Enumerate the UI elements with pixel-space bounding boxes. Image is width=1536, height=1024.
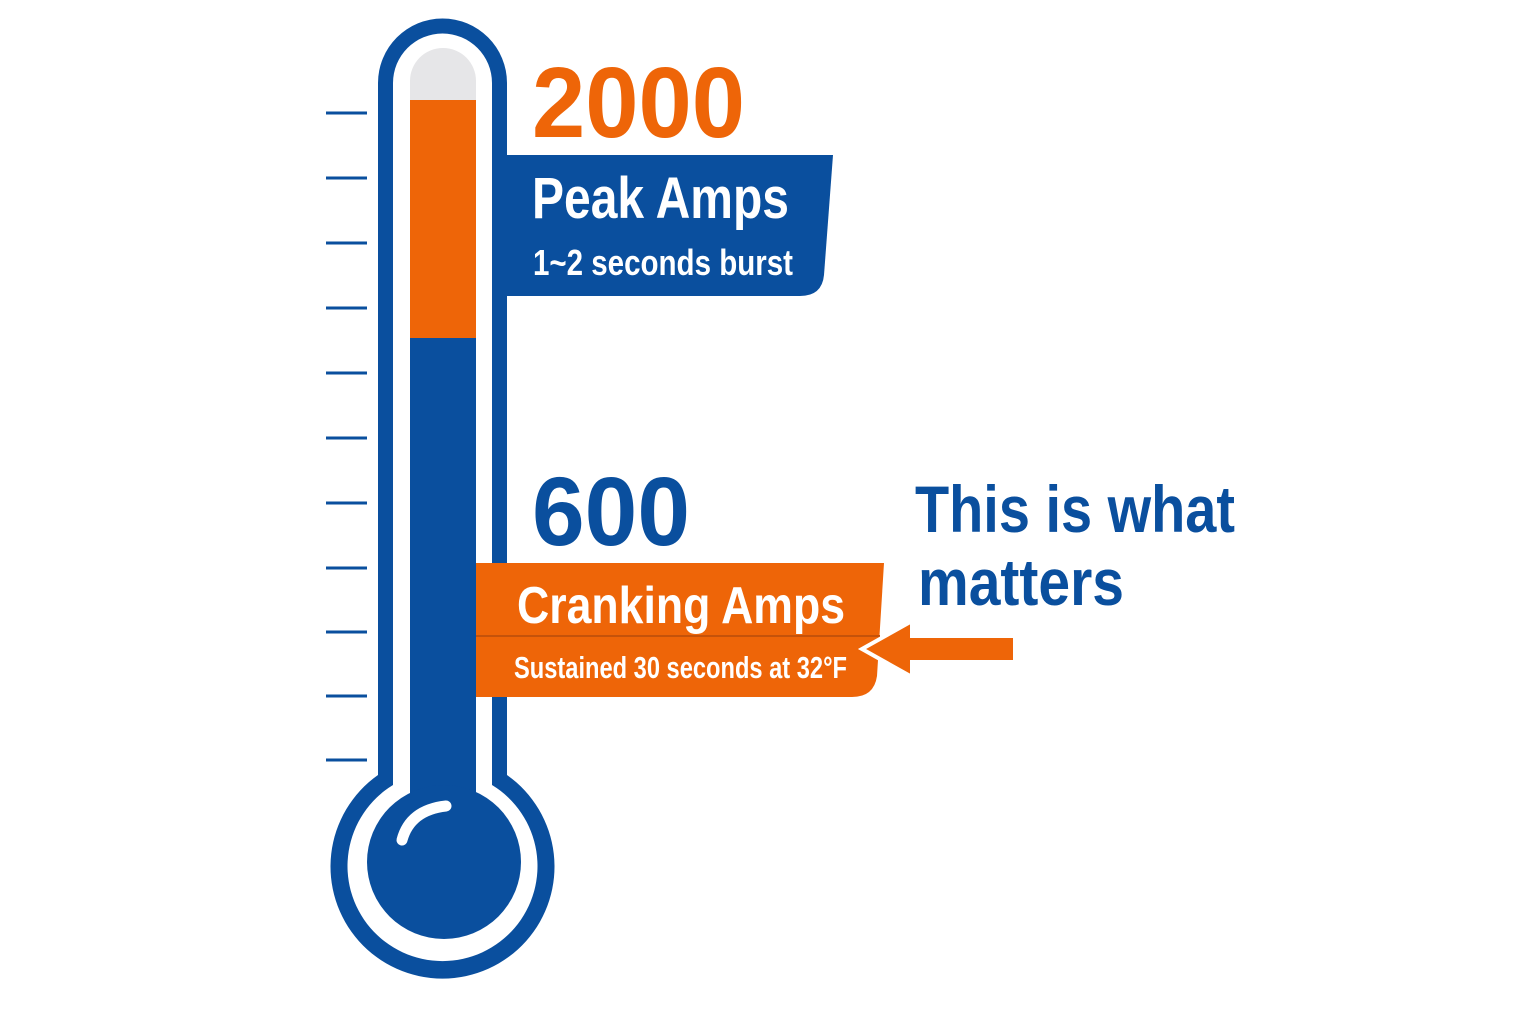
cranking amps value: 600 [532, 457, 690, 566]
peak amps banner [507, 155, 833, 296]
thermometer [330, 19, 555, 979]
tick marks [326, 113, 367, 760]
callout text: This is what [915, 472, 1235, 546]
cranking amps banner: Sustained 30 seconds at 32°F [514, 650, 847, 685]
callout text [915, 472, 1235, 619]
peak amps banner: Peak Amps [532, 166, 789, 231]
bulb highlight [402, 806, 446, 840]
peak amps banner: 1~2 seconds burst [533, 242, 793, 283]
cranking amps banner: Cranking Amps [517, 577, 845, 635]
callout text: matters [918, 545, 1124, 619]
peak amps value: 2000 [532, 47, 745, 159]
cranking amps banner [476, 563, 884, 697]
arrow [862, 621, 1015, 677]
